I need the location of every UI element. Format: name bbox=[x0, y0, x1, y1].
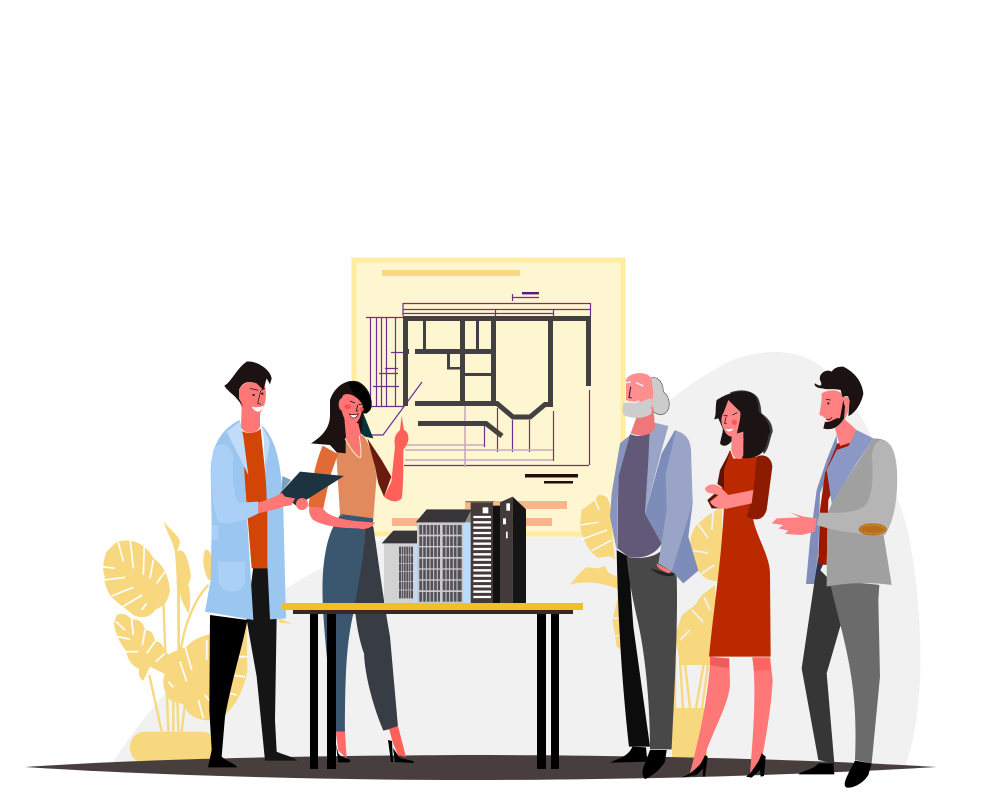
face features bbox=[250, 388, 265, 412]
jacket left panel bbox=[610, 435, 630, 550]
hair bbox=[224, 361, 272, 407]
cheek, eyes and mouth bbox=[723, 413, 737, 431]
neck bbox=[241, 407, 260, 433]
ear bbox=[339, 398, 345, 410]
face bbox=[626, 373, 653, 415]
monstera leaf top bbox=[580, 493, 615, 560]
person: older man in blue jacket bbox=[610, 373, 698, 779]
teal hair bbox=[358, 413, 373, 438]
jacket left panel bbox=[806, 435, 837, 584]
plant pot bbox=[130, 732, 217, 763]
coat pocket bbox=[218, 562, 245, 592]
leg left bbox=[690, 657, 730, 773]
coat left panel bbox=[205, 420, 253, 620]
monstera leaf middle bbox=[114, 614, 178, 681]
crossed arms bbox=[705, 484, 753, 509]
folded arm bbox=[309, 507, 375, 529]
cardigan drape bbox=[367, 438, 391, 497]
trousers and shoes bbox=[798, 567, 880, 788]
person: bearded man in grey jacket bbox=[772, 367, 897, 788]
shirt bbox=[818, 442, 852, 565]
table top bbox=[282, 603, 583, 610]
raised arm bbox=[384, 416, 408, 501]
lapel bbox=[227, 422, 248, 475]
sleeve behind clipboard bbox=[282, 476, 291, 492]
poster sheet bbox=[354, 260, 623, 534]
beard bbox=[823, 400, 845, 429]
right plant behind figures bbox=[672, 508, 723, 758]
face bbox=[239, 382, 266, 417]
man head bbox=[224, 361, 272, 433]
coat right panel bbox=[262, 425, 286, 619]
monstera leaf small bbox=[612, 595, 623, 652]
neck bbox=[631, 407, 655, 435]
hair back bbox=[311, 381, 372, 453]
floor shadow bbox=[25, 755, 937, 780]
building model bbox=[382, 497, 526, 603]
plant pot bbox=[672, 708, 707, 758]
hand bbox=[772, 512, 817, 535]
foot right bbox=[389, 726, 406, 757]
sleeve left bbox=[707, 450, 731, 508]
coat sleeve bbox=[211, 444, 258, 523]
poster title bar bbox=[382, 270, 520, 276]
necklace bbox=[345, 436, 361, 458]
person: man in lab coat bbox=[205, 361, 344, 767]
table bbox=[282, 603, 583, 769]
shirt bbox=[241, 428, 268, 568]
dark tower bbox=[493, 497, 526, 603]
shoe right bbox=[388, 740, 414, 763]
jacket sleeve bbox=[817, 440, 897, 535]
cheeks bbox=[344, 404, 364, 411]
jacket lapel bbox=[645, 422, 668, 513]
monstera leaf lower bbox=[163, 550, 292, 720]
sleeve right bbox=[747, 455, 772, 519]
dress bbox=[709, 450, 771, 657]
ear bbox=[238, 389, 244, 401]
trouser dark bbox=[802, 567, 841, 763]
right plant leaves over poster bbox=[570, 493, 623, 652]
floor plan walls bbox=[403, 316, 591, 436]
trouser right bbox=[627, 550, 677, 749]
woman head bbox=[311, 381, 373, 459]
jacket lining bbox=[814, 557, 823, 584]
trouser left bbox=[617, 550, 650, 747]
shoe left bbox=[336, 743, 351, 762]
monstera leaf right lower bbox=[675, 585, 718, 665]
mid building bbox=[416, 509, 472, 603]
lapel right bbox=[262, 425, 270, 465]
right leg bbox=[247, 567, 297, 761]
eye and smile bbox=[826, 399, 832, 420]
hair bbox=[815, 367, 863, 416]
blueprint poster bbox=[354, 260, 623, 534]
monstera leaf upper bbox=[103, 538, 170, 617]
plant stems bbox=[149, 585, 208, 732]
hair bbox=[714, 391, 770, 458]
trouser leg dark bbox=[355, 522, 398, 731]
jacket body bbox=[827, 438, 895, 587]
narrow leaf bbox=[164, 522, 191, 657]
neck and chest bbox=[344, 418, 362, 459]
brows, nose and mouth bbox=[625, 382, 643, 402]
jacket sleeve bbox=[658, 431, 693, 572]
trouser light bbox=[830, 583, 880, 763]
heel right bbox=[746, 753, 766, 778]
striped tower bbox=[466, 501, 494, 603]
left leg bbox=[208, 615, 247, 767]
person: woman in orange top bbox=[308, 381, 414, 763]
person: woman in red dress bbox=[682, 390, 773, 778]
eyes and mouth bbox=[349, 401, 362, 418]
table underside bbox=[293, 610, 573, 614]
monstera leaf right upper bbox=[690, 508, 723, 581]
left sleeve bbox=[308, 446, 338, 508]
hair bbox=[650, 378, 669, 415]
coat cuff bbox=[212, 525, 218, 540]
trouser leg blue bbox=[322, 515, 365, 732]
small title mark bbox=[522, 292, 539, 294]
shoes bbox=[610, 747, 667, 779]
neck bbox=[731, 432, 743, 459]
elbow patch bbox=[859, 523, 887, 535]
neck bbox=[835, 417, 857, 446]
face bbox=[819, 390, 849, 428]
face bbox=[341, 394, 363, 426]
hand on clipboard bbox=[258, 493, 295, 513]
left plant bbox=[103, 522, 292, 763]
scale bars bbox=[525, 474, 578, 484]
legs and heels bbox=[682, 657, 773, 778]
shoe left bbox=[798, 763, 834, 774]
torso top bbox=[337, 435, 377, 518]
knee shadows bbox=[710, 657, 771, 671]
hair highlight bbox=[730, 390, 773, 454]
beard bbox=[623, 398, 652, 418]
fringe bbox=[348, 381, 372, 414]
table legs bbox=[310, 614, 559, 769]
plant stems bbox=[675, 636, 712, 708]
grey background blob bbox=[113, 352, 920, 765]
foot left bbox=[336, 732, 347, 758]
woman legs bbox=[322, 515, 398, 762]
shoe right bbox=[845, 761, 872, 788]
trousers bbox=[208, 567, 297, 767]
face bbox=[721, 400, 740, 437]
leg right bbox=[750, 657, 773, 773]
dimension lines bbox=[366, 294, 590, 467]
jacket body bbox=[645, 430, 698, 583]
narrow leaf bbox=[570, 566, 618, 589]
jacket lapel bbox=[827, 430, 873, 503]
heel left bbox=[682, 755, 708, 778]
clipboard bbox=[280, 472, 344, 506]
shirt bbox=[617, 432, 662, 558]
belt bbox=[340, 514, 373, 526]
hand under clipboard bbox=[296, 498, 308, 510]
orange note bars bbox=[392, 501, 567, 526]
woman head bbox=[714, 390, 773, 459]
ear bbox=[844, 397, 850, 406]
pocket shadow and hand bbox=[650, 563, 675, 576]
low building bbox=[382, 531, 420, 603]
